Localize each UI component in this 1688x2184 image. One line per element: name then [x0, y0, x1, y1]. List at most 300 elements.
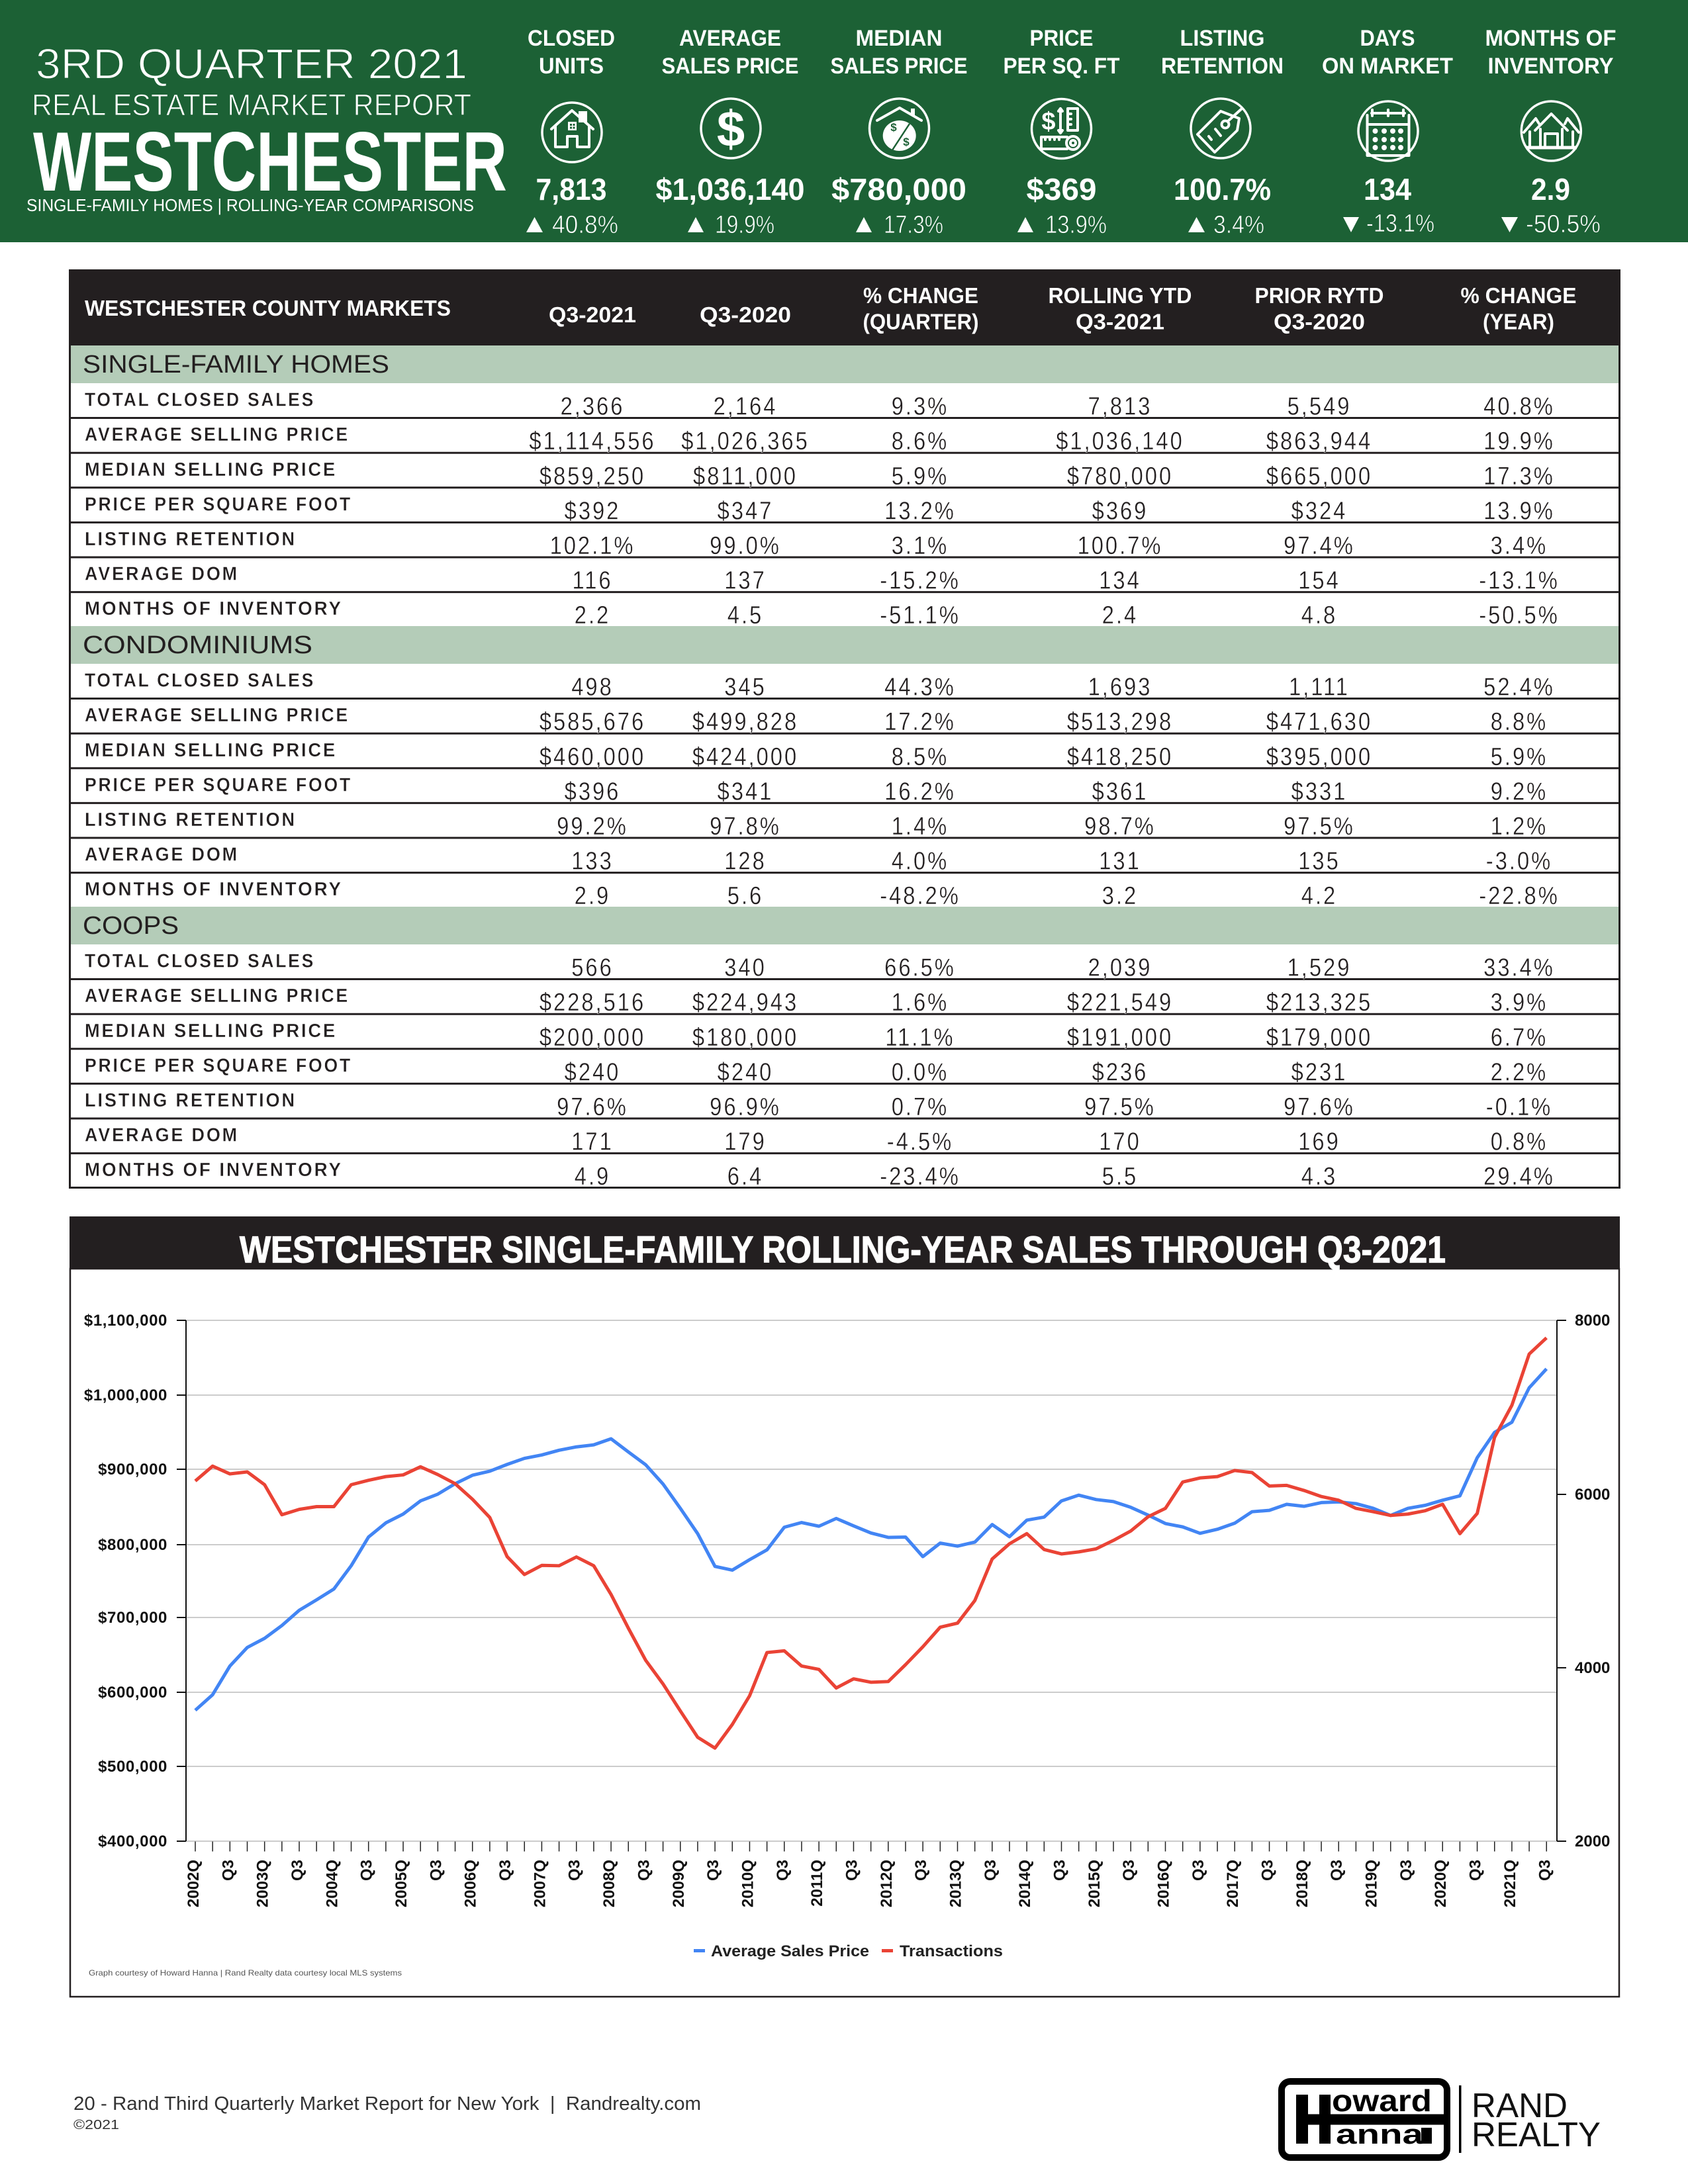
row: total closed sales: 2,164: [714, 392, 777, 420]
stat: months of inventory: [1485, 26, 1617, 238]
row: listing retention: [85, 809, 1548, 841]
left axis labels: $700,000: [98, 1609, 167, 1627]
row: listing retention: 97.8%: [710, 812, 781, 841]
row: total closed sales: 66.5%: [884, 953, 956, 981]
row: listing retention: 97.6%: [1284, 1093, 1355, 1121]
row: price per square foot: $396: [565, 777, 620, 805]
row: average DOM: 169: [1298, 1127, 1340, 1156]
stat: median sales price: $780,000: [831, 172, 966, 206]
x axis labels: Q3: [774, 1860, 792, 1881]
row: months of inventory: [85, 879, 1560, 910]
left axis labels: $600,000: [98, 1684, 167, 1702]
table header: Q3-2021: [549, 302, 636, 327]
row: listing retention: 3.1%: [892, 531, 949, 560]
row: median selling price: $418,250: [1067, 742, 1173, 770]
row: months of inventory: 4.9: [575, 1162, 610, 1191]
row: average selling price: $213,325: [1266, 988, 1372, 1017]
left axis labels: [84, 1312, 167, 1850]
row: average selling price: [85, 424, 1555, 455]
left axis labels: $500,000: [98, 1758, 167, 1776]
row: total closed sales: 345: [724, 672, 767, 701]
x axis labels: Q3: [566, 1860, 584, 1881]
row: months of inventory: 29.4%: [1483, 1162, 1555, 1191]
logo: Rand Realty: REALTY: [1472, 2116, 1601, 2154]
row: price per square foot: 16.2%: [884, 777, 956, 805]
icon: house: [542, 103, 602, 162]
row: average DOM: AVERAGE DOM: [85, 564, 239, 585]
row: price per square foot: $324: [1291, 496, 1347, 525]
table header: Q3-2020: [1274, 310, 1365, 334]
row: total closed sales: 52.4%: [1483, 672, 1555, 701]
row: months of inventory: 3.2: [1102, 882, 1138, 910]
row: median selling price: $424,000: [692, 742, 798, 770]
row: average DOM: [85, 564, 1560, 594]
row: median selling price: $191,000: [1067, 1023, 1173, 1051]
table header: ROLLING YTD: [1049, 283, 1192, 308]
stat: listing retention: 3.4%: [1213, 211, 1264, 239]
chart title bar: [70, 1216, 1620, 1271]
x axis labels: 2006Q: [462, 1860, 480, 1907]
row: average selling price: $1,114,556: [529, 427, 656, 455]
row: average selling price: [85, 985, 1548, 1017]
icon: price tag: [1191, 99, 1250, 158]
x axis labels: 2008Q: [600, 1860, 618, 1907]
row: months of inventory: 2.4: [1102, 601, 1138, 629]
row: average selling price: $224,943: [692, 988, 798, 1017]
stat: average sales price: [655, 26, 805, 239]
stat: closed units: 40.8%: [552, 211, 618, 239]
row: average DOM: 134: [1099, 566, 1141, 594]
section: coops: [70, 907, 1620, 1191]
row: price per square foot: 13.9%: [1483, 496, 1555, 525]
footer text: ©2021: [73, 2118, 119, 2132]
row: average DOM: AVERAGE DOM: [85, 1125, 239, 1146]
row: listing retention: 99.0%: [710, 531, 781, 560]
line chart plot: [84, 1312, 1610, 1907]
row: price per square foot: [85, 494, 1555, 525]
row: months of inventory: MONTHS OF INVENTORY: [85, 598, 343, 619]
icon: dollar: $: [717, 101, 745, 158]
row: average selling price: $499,828: [692, 707, 798, 736]
row: price per square foot: PRICE PER SQUARE FOOT: [85, 774, 352, 796]
chart title bar: WESTCHESTER SINGLE-FAMILY ROLLING-YEAR SALES THROUGH Q3-2021: [240, 1229, 1446, 1271]
x axis labels: Q3: [1536, 1860, 1554, 1881]
icon: calendar: [1358, 101, 1418, 161]
heading: Westchester: WESTCHESTER: [33, 114, 507, 208]
x axis labels: 2016Q: [1154, 1860, 1173, 1907]
row: price per square foot: $341: [718, 777, 773, 805]
row: total closed sales: 5,549: [1288, 392, 1351, 420]
row: months of inventory: [85, 598, 1560, 629]
row: median selling price: $395,000: [1266, 742, 1372, 770]
row: listing retention: 97.5%: [1284, 812, 1355, 841]
row: total closed sales: TOTAL CLOSED SALES: [85, 670, 315, 691]
x axis labels: 2014Q: [1016, 1860, 1034, 1907]
right axis labels: 6000: [1575, 1486, 1610, 1504]
row: months of inventory: 4.8: [1301, 601, 1337, 629]
row: total closed sales: 1,111: [1289, 672, 1350, 701]
section: condominiums: [70, 626, 1620, 910]
row: average selling price: AVERAGE SELLING PRICE: [85, 424, 350, 445]
icon: dollar and ruler: $: [1041, 108, 1056, 136]
row: price per square foot: $361: [1092, 777, 1148, 805]
stat: median sales price: 17.3%: [884, 211, 943, 239]
row: average DOM: -13.1%: [1479, 566, 1560, 594]
row: average selling price: $1,026,365: [681, 427, 810, 455]
right axis labels: [1575, 1312, 1610, 1850]
row: price per square foot: $392: [565, 496, 620, 525]
row: price per square foot: $331: [1291, 777, 1347, 805]
table header: PRIOR RYTD: [1255, 283, 1383, 308]
row: total closed sales: [85, 950, 1555, 981]
stat: closed units: 7,813: [536, 172, 606, 206]
x axis labels: Q3: [496, 1860, 514, 1881]
table header: WESTCHESTER COUNTY MARKETS: [85, 296, 451, 320]
row: average DOM: 4.0%: [892, 846, 949, 875]
row: price per square foot: $231: [1291, 1058, 1347, 1086]
x axis labels: 2019Q: [1363, 1860, 1381, 1907]
chart legend: [694, 1942, 1003, 1960]
table header: Q3-2020: [700, 302, 791, 327]
x axis labels: 2015Q: [1086, 1860, 1103, 1907]
row: total closed sales: [85, 670, 1555, 701]
row: average DOM: 128: [724, 846, 767, 875]
icon: dollar: [701, 99, 761, 158]
x axis labels: 2009Q: [670, 1860, 688, 1907]
row: median selling price: [85, 740, 1548, 770]
row: months of inventory: 4.3: [1301, 1162, 1337, 1191]
stat: months of inventory: INVENTORY: [1488, 54, 1614, 79]
row: median selling price: [85, 459, 1555, 490]
row: average selling price: $1,036,140: [1056, 427, 1184, 455]
series: average sales price: [195, 1369, 1546, 1710]
row: listing retention: LISTING RETENTION: [85, 529, 297, 550]
row: average selling price: $471,630: [1266, 707, 1372, 736]
row: total closed sales: [85, 389, 1555, 420]
x axis labels: 2018Q: [1293, 1860, 1311, 1907]
series: transactions: [195, 1338, 1546, 1748]
x axis labels: Q3: [427, 1860, 445, 1881]
icon: house over price disc: [870, 99, 929, 158]
x axis labels: Q3: [358, 1860, 376, 1881]
stat: closed units: CLOSED: [528, 26, 615, 51]
chart legend: Transactions: [900, 1942, 1003, 1960]
row: listing retention: 99.2%: [557, 812, 628, 841]
row: months of inventory: 5.5: [1102, 1162, 1138, 1191]
row: total closed sales: 2,366: [561, 392, 624, 420]
row: price per square foot: $347: [718, 496, 773, 525]
x axis labels: 2013Q: [947, 1860, 965, 1907]
row: listing retention: LISTING RETENTION: [85, 1090, 297, 1111]
x axis labels: Q3: [982, 1860, 1000, 1881]
row: average DOM: 170: [1099, 1127, 1141, 1156]
table header: (YEAR): [1483, 310, 1554, 334]
stat: days on market: 134: [1364, 172, 1411, 206]
x axis labels: 2021Q: [1501, 1860, 1519, 1907]
stat: median sales price: MEDIAN: [855, 26, 943, 51]
row: listing retention: [85, 1090, 1552, 1121]
logo: Howard Hanna: anna: [1336, 2118, 1424, 2150]
row: listing retention: 102.1%: [550, 531, 635, 560]
row: average selling price: $863,944: [1266, 427, 1372, 455]
x axis labels: Q3: [912, 1860, 930, 1881]
x axis labels: 2007Q: [531, 1860, 549, 1907]
icon: house over price disc: $: [890, 121, 897, 134]
row: median selling price: 8.5%: [892, 742, 949, 770]
row: average selling price: 8.6%: [892, 427, 949, 455]
left axis labels: $400,000: [98, 1833, 167, 1850]
row: average DOM: 179: [724, 1127, 767, 1156]
x axis labels: 2003Q: [254, 1860, 272, 1907]
row: months of inventory: [85, 1160, 1555, 1191]
row: median selling price: $859,250: [539, 461, 645, 490]
row: price per square foot: 9.2%: [1491, 777, 1548, 805]
stat: days on market: [1322, 26, 1453, 238]
row: average DOM: [85, 1125, 1548, 1156]
stat: price per square foot: PRICE: [1030, 26, 1094, 51]
section: single-family homes: SINGLE-FAMILY HOMES: [83, 351, 389, 379]
footer text: [73, 2093, 701, 2132]
logo: Howard Hanna: oward: [1332, 2083, 1432, 2118]
footer text: 20 - Rand Third Quarterly Market Report for New York | Randrealty.com: [73, 2093, 701, 2115]
table header: Q3-2021: [1076, 310, 1164, 334]
row: median selling price: $811,000: [693, 461, 798, 490]
stat: listing retention: LISTING: [1180, 26, 1264, 51]
x axis labels: 2011Q: [808, 1860, 826, 1907]
stat: months of inventory: MONTHS OF: [1485, 26, 1617, 51]
row: average DOM: 133: [571, 846, 614, 875]
table header: (QUARTER): [863, 310, 978, 334]
x axis labels: 2012Q: [878, 1860, 896, 1907]
x axis labels: 2004Q: [323, 1860, 341, 1907]
row: total closed sales: 33.4%: [1483, 953, 1555, 981]
row: total closed sales: 1,529: [1288, 953, 1351, 981]
x axis labels: Q3: [1051, 1860, 1068, 1881]
stat: listing retention: RETENTION: [1161, 54, 1284, 79]
x axis labels: 2005Q: [393, 1860, 410, 1907]
left axis labels: $900,000: [98, 1461, 167, 1479]
stat: listing retention: [1161, 26, 1284, 239]
x axis labels: [185, 1860, 1554, 1907]
row: median selling price: 17.3%: [1483, 461, 1555, 490]
row: listing retention: 97.5%: [1084, 1093, 1156, 1121]
row: median selling price: MEDIAN SELLING PRICE: [85, 459, 337, 480]
left axis labels: $1,100,000: [84, 1312, 167, 1330]
stat: days on market: ON MARKET: [1322, 54, 1453, 79]
x axis labels: 2017Q: [1224, 1860, 1242, 1907]
row: total closed sales: 1,693: [1088, 672, 1152, 701]
table header: [70, 270, 1620, 345]
stat: months of inventory: 2.9: [1531, 172, 1570, 206]
chart source note: Graph courtesy of Howard Hanna | Rand Realty data courtesy local MLS systems: [89, 1968, 402, 1978]
row: months of inventory: 2.2: [575, 601, 610, 629]
row: average DOM: 0.8%: [1491, 1127, 1548, 1156]
row: average selling price: 1.6%: [892, 988, 949, 1017]
table header: % CHANGE: [1460, 283, 1577, 308]
row: months of inventory: -48.2%: [880, 882, 961, 910]
row: price per square foot: $240: [565, 1058, 620, 1086]
stat: average sales price: 19.9%: [715, 211, 774, 239]
x axis labels: Q3: [289, 1860, 306, 1881]
row: months of inventory: 4.5: [727, 601, 763, 629]
right axis labels: 8000: [1575, 1312, 1610, 1330]
x axis labels: Q3: [1328, 1860, 1346, 1881]
stat: closed units: [526, 26, 618, 239]
row: average DOM: [85, 844, 1552, 875]
stat: days on market: DAYS: [1360, 26, 1415, 51]
row: months of inventory: MONTHS OF INVENTORY: [85, 1160, 343, 1181]
right axis labels: 2000: [1575, 1833, 1610, 1850]
x axis labels: 2020Q: [1432, 1860, 1450, 1907]
stat: months of inventory: -50.5%: [1526, 210, 1601, 238]
icon: dollar and ruler: [1031, 99, 1091, 159]
row: months of inventory: MONTHS OF INVENTORY: [85, 879, 343, 900]
row: average selling price: $221,549: [1067, 988, 1173, 1017]
row: price per square foot: [85, 774, 1548, 805]
x axis labels: Q3: [704, 1860, 722, 1881]
row: listing retention: 1.4%: [892, 812, 949, 841]
header banner: [0, 0, 1688, 242]
row: listing retention: 97.4%: [1284, 531, 1355, 560]
stat: average sales price: AVERAGE: [679, 26, 781, 51]
row: listing retention: 97.6%: [557, 1093, 628, 1121]
row: listing retention: 96.9%: [710, 1093, 781, 1121]
row: months of inventory: 4.2: [1301, 882, 1337, 910]
icon: house over price disc: $: [903, 136, 910, 148]
x axis labels: Q3: [1120, 1860, 1138, 1881]
row: average DOM: AVERAGE DOM: [85, 844, 239, 866]
row: total closed sales: TOTAL CLOSED SALES: [85, 389, 315, 410]
chart legend: Average Sales Price: [711, 1942, 869, 1960]
row: average DOM: 135: [1298, 846, 1340, 875]
title: 3rd quarter 2021: 3RD QUARTER 2021: [36, 40, 467, 88]
x axis labels: Q3: [1259, 1860, 1276, 1881]
subtitle: real estate market report: REAL ESTATE MARKET REPORT: [32, 88, 471, 122]
left axis labels: $1,000,000: [84, 1387, 167, 1404]
row: average selling price: $228,516: [539, 988, 645, 1017]
logo: Rand Realty: [1459, 2085, 1601, 2154]
row: total closed sales: 40.8%: [1483, 392, 1555, 420]
x axis labels: Q3: [1467, 1860, 1485, 1881]
row: total closed sales: 2,039: [1088, 953, 1152, 981]
row: average selling price: $513,298: [1067, 707, 1173, 736]
row: average DOM: -4.5%: [887, 1127, 953, 1156]
row: total closed sales: 7,813: [1088, 392, 1152, 420]
stat: closed units: UNITS: [539, 54, 604, 79]
row: median selling price: $665,000: [1266, 461, 1372, 490]
row: average DOM: -15.2%: [880, 566, 961, 594]
row: price per square foot: $240: [718, 1058, 773, 1086]
row: price per square foot: $236: [1092, 1058, 1148, 1086]
row: average DOM: -3.0%: [1486, 846, 1552, 875]
stat: days on market: -13.1%: [1366, 210, 1434, 238]
row: average DOM: 116: [572, 566, 613, 594]
row: listing retention: 3.4%: [1491, 531, 1548, 560]
row: total closed sales: 498: [571, 672, 614, 701]
row: price per square foot: 13.2%: [884, 496, 956, 525]
row: average selling price: 3.9%: [1491, 988, 1548, 1017]
stat: average sales price: $1,036,140: [655, 172, 805, 206]
row: average selling price: $585,676: [539, 707, 645, 736]
section: condominiums: CONDOMINIUMS: [83, 631, 312, 659]
row: months of inventory: -51.1%: [880, 601, 961, 629]
row: total closed sales: TOTAL CLOSED SALES: [85, 950, 315, 972]
row: listing retention: 98.7%: [1084, 812, 1156, 841]
row: median selling price: $180,000: [692, 1023, 798, 1051]
x axis labels: Q3: [843, 1860, 861, 1881]
row: total closed sales: 566: [571, 953, 614, 981]
x axis labels: Q3: [635, 1860, 653, 1881]
right axis labels: 4000: [1575, 1659, 1610, 1677]
stat: price per square foot: PER SQ. FT: [1004, 54, 1120, 79]
x axis labels: Q3: [1190, 1860, 1207, 1881]
row: listing retention: -0.1%: [1486, 1093, 1552, 1121]
stat: price per square foot: 13.9%: [1045, 211, 1107, 239]
row: price per square foot: 2.2%: [1491, 1058, 1548, 1086]
row: median selling price: $780,000: [1067, 461, 1173, 490]
row: price per square foot: PRICE PER SQUARE FOOT: [85, 494, 352, 515]
row: months of inventory: -23.4%: [880, 1162, 961, 1191]
stat: price per square foot: $369: [1026, 172, 1096, 206]
icon: houses: [1521, 101, 1581, 161]
row: price per square foot: [85, 1055, 1548, 1086]
row: median selling price: MEDIAN SELLING PRICE: [85, 740, 337, 761]
row: average selling price: 17.2%: [884, 707, 956, 736]
row: median selling price: 6.7%: [1491, 1023, 1548, 1051]
stat: listing retention: 100.7%: [1174, 172, 1271, 206]
row: price per square foot: 0.0%: [892, 1058, 949, 1086]
stat: median sales price: SALES PRICE: [830, 54, 968, 79]
row: price per square foot: PRICE PER SQUARE FOOT: [85, 1055, 352, 1076]
row: months of inventory: 6.4: [727, 1162, 763, 1191]
row: average selling price: [85, 705, 1548, 736]
stat: price per square foot: [1004, 26, 1120, 239]
row: average DOM: 171: [571, 1127, 614, 1156]
row: months of inventory: 5.6: [727, 882, 763, 910]
row: average selling price: AVERAGE SELLING PRICE: [85, 985, 350, 1007]
row: median selling price: $460,000: [539, 742, 645, 770]
logo: Howard Hanna: [1282, 2081, 1447, 2158]
table header: % CHANGE: [863, 283, 978, 308]
panel: rolling-year sales chart: [70, 1216, 1620, 1997]
stat: median sales price: [830, 26, 968, 239]
row: total closed sales: 44.3%: [884, 672, 956, 701]
row: average selling price: 19.9%: [1483, 427, 1555, 455]
row: median selling price: $200,000: [539, 1023, 645, 1051]
row: median selling price: 11.1%: [885, 1023, 955, 1051]
stat: average sales price: SALES PRICE: [662, 54, 798, 79]
x axis labels: 2002Q: [185, 1860, 203, 1907]
row: average selling price: 8.8%: [1491, 707, 1548, 736]
row: average selling price: AVERAGE SELLING PRICE: [85, 705, 350, 726]
row: months of inventory: 2.9: [575, 882, 610, 910]
row: average DOM: 131: [1099, 846, 1141, 875]
section: coops: COOPS: [83, 912, 179, 940]
left axis labels: $800,000: [98, 1536, 167, 1554]
row: median selling price: $179,000: [1266, 1023, 1372, 1051]
row: listing retention: 0.7%: [892, 1093, 949, 1121]
row: listing retention: LISTING RETENTION: [85, 809, 297, 831]
row: median selling price: MEDIAN SELLING PRICE: [85, 1021, 337, 1042]
section: single-family homes: [70, 345, 1620, 629]
row: median selling price: 5.9%: [1491, 742, 1548, 770]
row: listing retention: [85, 529, 1548, 560]
x axis labels: 2010Q: [739, 1860, 757, 1907]
panel: markets table: [70, 270, 1620, 1191]
row: months of inventory: -22.8%: [1479, 882, 1560, 910]
x axis labels: Q3: [219, 1860, 237, 1881]
row: price per square foot: $369: [1092, 496, 1148, 525]
